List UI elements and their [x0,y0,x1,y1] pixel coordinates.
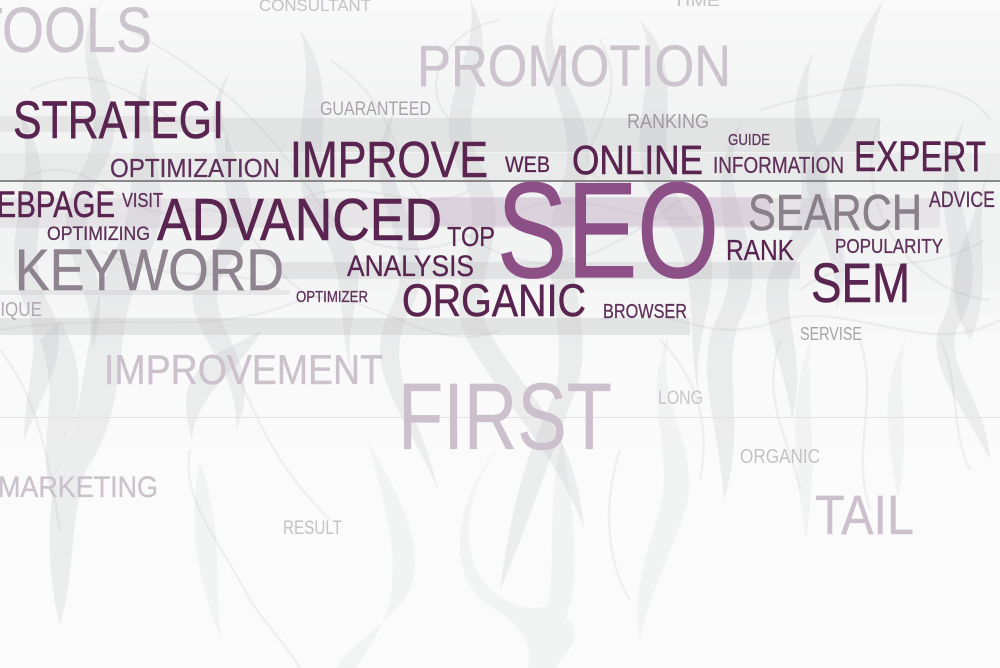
word: INFORMATION: INFORMATION [713,152,844,178]
word: TOP: TOP [447,221,495,252]
word: ORGANIC: ORGANIC [402,275,586,326]
word: OPTIMIZATION: OPTIMIZATION [110,153,280,183]
word: ONLINE: ONLINE [572,137,703,183]
word: VISIT: VISIT [122,190,163,212]
word: KEYWORD: KEYWORD [15,238,284,303]
word: GUARANTEED: GUARANTEED [320,99,431,120]
word: RANK: RANK [726,235,795,267]
word: OPTIMIZING: OPTIMIZING [47,224,150,245]
word: OPTIMIZER: OPTIMIZER [296,289,368,306]
word: IMPROVE: IMPROVE [290,131,488,188]
word: PROMOTION: PROMOTION [417,34,731,99]
word: IMPROVEMENT: IMPROVEMENT [104,346,383,393]
word: GUIDE: GUIDE [728,132,770,149]
divider line lower [0,417,1000,418]
word: BROWSER: BROWSER [603,301,687,323]
word: SEM: SEM [811,251,910,314]
word: SEARCH: SEARCH [748,184,922,241]
word: ANALYSIS: ANALYSIS [347,250,474,283]
word: RESULT: RESULT [283,518,342,539]
word: SEO: SEO [497,154,719,306]
word: RANKING: RANKING [627,111,709,133]
word: SERVISE: SERVISE [800,324,862,344]
word: POPULARITY: POPULARITY [835,236,943,258]
tapered faint strands lower [195,330,905,668]
word: MARKETING: MARKETING [0,471,158,504]
word: LONG: LONG [658,388,703,409]
divider line upper [0,180,1000,182]
word: WEB: WEB [505,152,550,177]
word: ADVANCED: ADVANCED [157,187,442,253]
translucent horizontal bands [0,116,1000,335]
word: TAIL: TAIL [815,483,914,546]
word: FIRST: FIRST [398,364,612,470]
word: ORGANIC lower: ORGANIC [740,446,820,468]
word: STRATEGI: STRATEGI [13,91,224,150]
